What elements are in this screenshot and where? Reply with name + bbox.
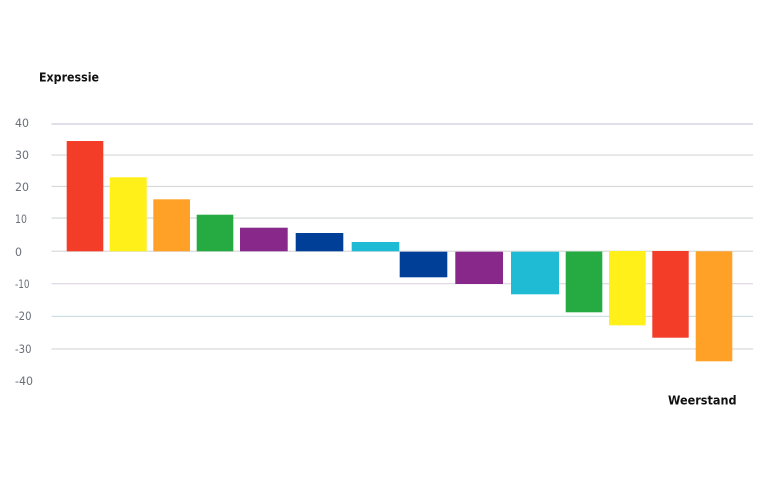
y axis labels: 30: [15, 148, 29, 162]
y axis labels: 20: [15, 180, 29, 194]
y axis labels: [15, 116, 33, 388]
y axis labels: 40: [15, 116, 29, 130]
y axis labels: 10: [15, 212, 27, 226]
axis title: Weerstand: Weerstand: [668, 394, 736, 408]
y axis labels: -40: [15, 374, 33, 388]
y axis labels: -10: [15, 277, 30, 291]
y axis labels: -30: [15, 342, 32, 356]
y axis labels: -20: [15, 309, 32, 323]
axis title: Expressie: Expressie: [39, 70, 99, 84]
positive bars: [67, 141, 399, 251]
negative bars: [400, 251, 732, 361]
y axis labels: 0: [15, 245, 22, 259]
